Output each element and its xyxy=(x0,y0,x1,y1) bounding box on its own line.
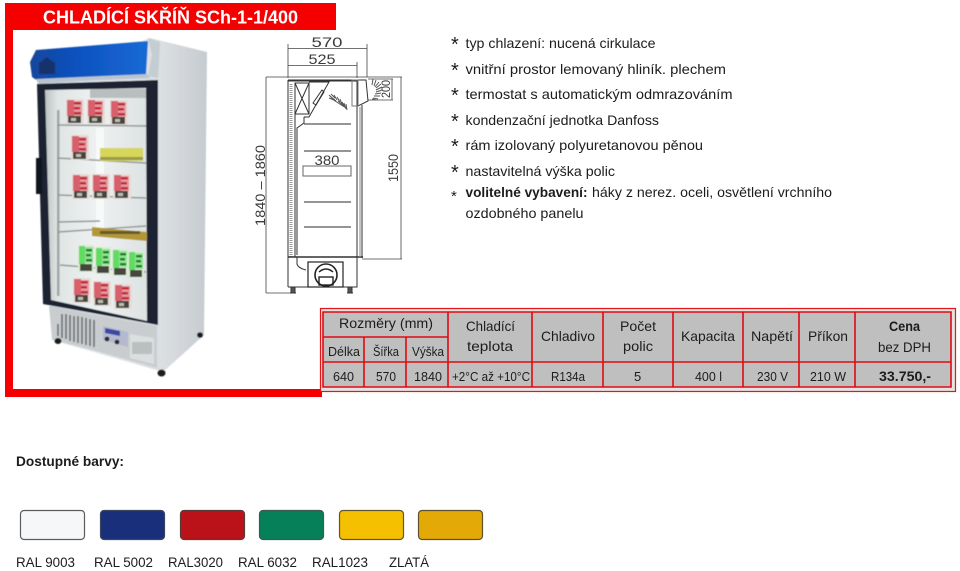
bullet: thermostat: termostat s automatickým odmrazováním xyxy=(466,86,732,102)
table cell background xyxy=(323,312,951,387)
header labels xyxy=(328,315,931,359)
value row: 640 xyxy=(333,369,354,384)
shelves xyxy=(57,125,146,272)
white top panel edge xyxy=(148,38,160,78)
colour labels xyxy=(16,554,430,570)
bullet: shelves xyxy=(451,162,615,184)
illuminated blue top panel xyxy=(30,41,148,81)
bullet: frame: * xyxy=(451,136,459,158)
bullet: shelves: * xyxy=(451,162,459,184)
ventilation grille xyxy=(58,314,94,347)
cabinet body xyxy=(38,38,207,372)
header labels: Délka xyxy=(328,344,361,359)
bullet: condensing unit: * xyxy=(451,111,459,133)
red product frame xyxy=(5,3,336,397)
lower pink products xyxy=(73,278,132,309)
bullet: optional equipment xyxy=(451,184,832,221)
dimension 1550 xyxy=(362,77,402,259)
dimension 200: 200 xyxy=(379,80,393,98)
top row of products xyxy=(66,99,128,125)
shelf box xyxy=(303,166,351,176)
value row: 400 l xyxy=(695,369,722,384)
dimension 380: 380 xyxy=(314,152,340,168)
bullet: cooling type: * xyxy=(451,34,459,56)
cabinet feet xyxy=(290,287,353,293)
swatch: RAL 1023 xyxy=(340,510,404,540)
technical drawing with dimensions xyxy=(252,34,402,293)
header labels: teplota xyxy=(467,338,513,354)
header labels: Napětí xyxy=(751,328,793,344)
bullet: condensing unit: kondenzační jednotka Danfoss xyxy=(466,112,659,128)
colour swatches xyxy=(20,510,482,540)
control display xyxy=(103,326,128,347)
header labels: Šířka xyxy=(373,344,400,359)
value row: 33.750,- xyxy=(879,368,931,384)
table grid xyxy=(323,312,951,387)
colour labels: RAL 5002 xyxy=(94,554,153,570)
drip tray xyxy=(130,334,154,364)
value row: 1840 xyxy=(414,369,442,384)
dimension 380 xyxy=(303,152,351,168)
bullet: optional equipment: ozdobného panelu xyxy=(466,205,584,221)
product photo: refrigerated display cabinet xyxy=(30,38,207,376)
glass door frame xyxy=(37,80,158,325)
bullet: condensing unit xyxy=(451,111,659,133)
third row of products xyxy=(72,174,131,199)
header labels: Počet xyxy=(620,318,656,334)
bullet: interior xyxy=(451,60,726,82)
header labels: polic xyxy=(623,338,653,354)
bullet: thermostat xyxy=(451,85,732,107)
available colours heading: Dostupné barvy: xyxy=(16,453,124,469)
swatch: RAL 5002 xyxy=(100,510,164,540)
feature list xyxy=(451,34,832,221)
header labels: Cena xyxy=(889,318,920,334)
swatch: RAL 6032 xyxy=(260,510,324,540)
header labels: Kapacita xyxy=(681,328,735,344)
feet xyxy=(54,332,203,376)
header labels: Rozměry (mm) xyxy=(339,315,433,331)
door glass xyxy=(45,88,147,321)
condensing unit xyxy=(308,262,343,287)
bullet: frame xyxy=(451,136,703,158)
value row: 570 xyxy=(376,369,396,384)
colour labels: ZLATÁ xyxy=(389,554,430,570)
value row: +2°C až +10°C xyxy=(452,369,530,384)
bullet: cooling type: typ chlazení: nucená cirkulace xyxy=(466,35,656,51)
bullet: interior: vnitřní prostor lemovaný hliník. plechem xyxy=(466,61,726,77)
colour labels: RAL 9003 xyxy=(16,554,75,570)
header labels: Příkon xyxy=(808,328,848,344)
colour labels: RAL1023 xyxy=(312,554,368,570)
back wall details xyxy=(57,89,146,296)
dimension 525: 525 xyxy=(308,51,336,67)
bullet: interior: * xyxy=(451,60,459,82)
header labels: Výška xyxy=(412,344,445,359)
lower lip of top panel xyxy=(36,74,150,83)
bullet: cooling type xyxy=(451,34,656,56)
bullet: frame: rám izolovaný polyuretanovou pěnou xyxy=(466,137,703,153)
swatch: RAL 9003 xyxy=(20,510,84,540)
door handle xyxy=(36,158,42,194)
logo on blue panel xyxy=(39,57,55,74)
dimension 200 xyxy=(368,79,393,100)
shelves in section xyxy=(304,124,351,227)
bullet: thermostat: * xyxy=(451,85,459,107)
cabinet section outline xyxy=(288,80,368,287)
header labels: Chladící xyxy=(466,318,515,334)
header labels: Chladivo xyxy=(541,328,595,344)
bullet: shelves: nastavitelná výška polic xyxy=(466,163,615,179)
header labels: bez DPH xyxy=(878,339,931,355)
value row: R134a xyxy=(551,369,586,384)
swatch: RAL 3020 xyxy=(180,510,244,540)
bullet: optional equipment: volitelné vybavení: xyxy=(466,184,588,200)
dimension 1840 – 1860: 1840 – 1860 xyxy=(252,145,268,226)
colour labels: RAL 6032 xyxy=(238,554,297,570)
bullet: optional equipment: háky z nerez. oceli, osvětlení vrchního xyxy=(592,184,832,200)
value row xyxy=(333,368,931,384)
dimension 570 xyxy=(288,34,367,78)
dimension 570: 570 xyxy=(312,34,343,50)
value row: 230 V xyxy=(757,369,788,384)
specification table xyxy=(320,308,956,392)
table outer border xyxy=(320,308,956,392)
bullet: optional equipment: * xyxy=(451,188,457,205)
dimension 1550: 1550 xyxy=(385,154,401,182)
second row of products xyxy=(71,135,143,161)
airflow arrows xyxy=(329,79,382,110)
swatch: gold xyxy=(418,510,482,540)
lower machine compartment xyxy=(49,306,157,368)
title: CHLADÍCÍ SKŘÍŇ SCh-1-1/400 xyxy=(43,6,298,28)
yellow goods on fourth shelf xyxy=(92,227,147,241)
value row: 5 xyxy=(634,369,641,384)
value row: 210 W xyxy=(810,369,847,384)
colour labels: RAL3020 xyxy=(168,554,223,570)
dimension 1840 – 1860 xyxy=(252,77,402,293)
dimension 525 xyxy=(288,51,357,78)
green products xyxy=(78,245,144,278)
